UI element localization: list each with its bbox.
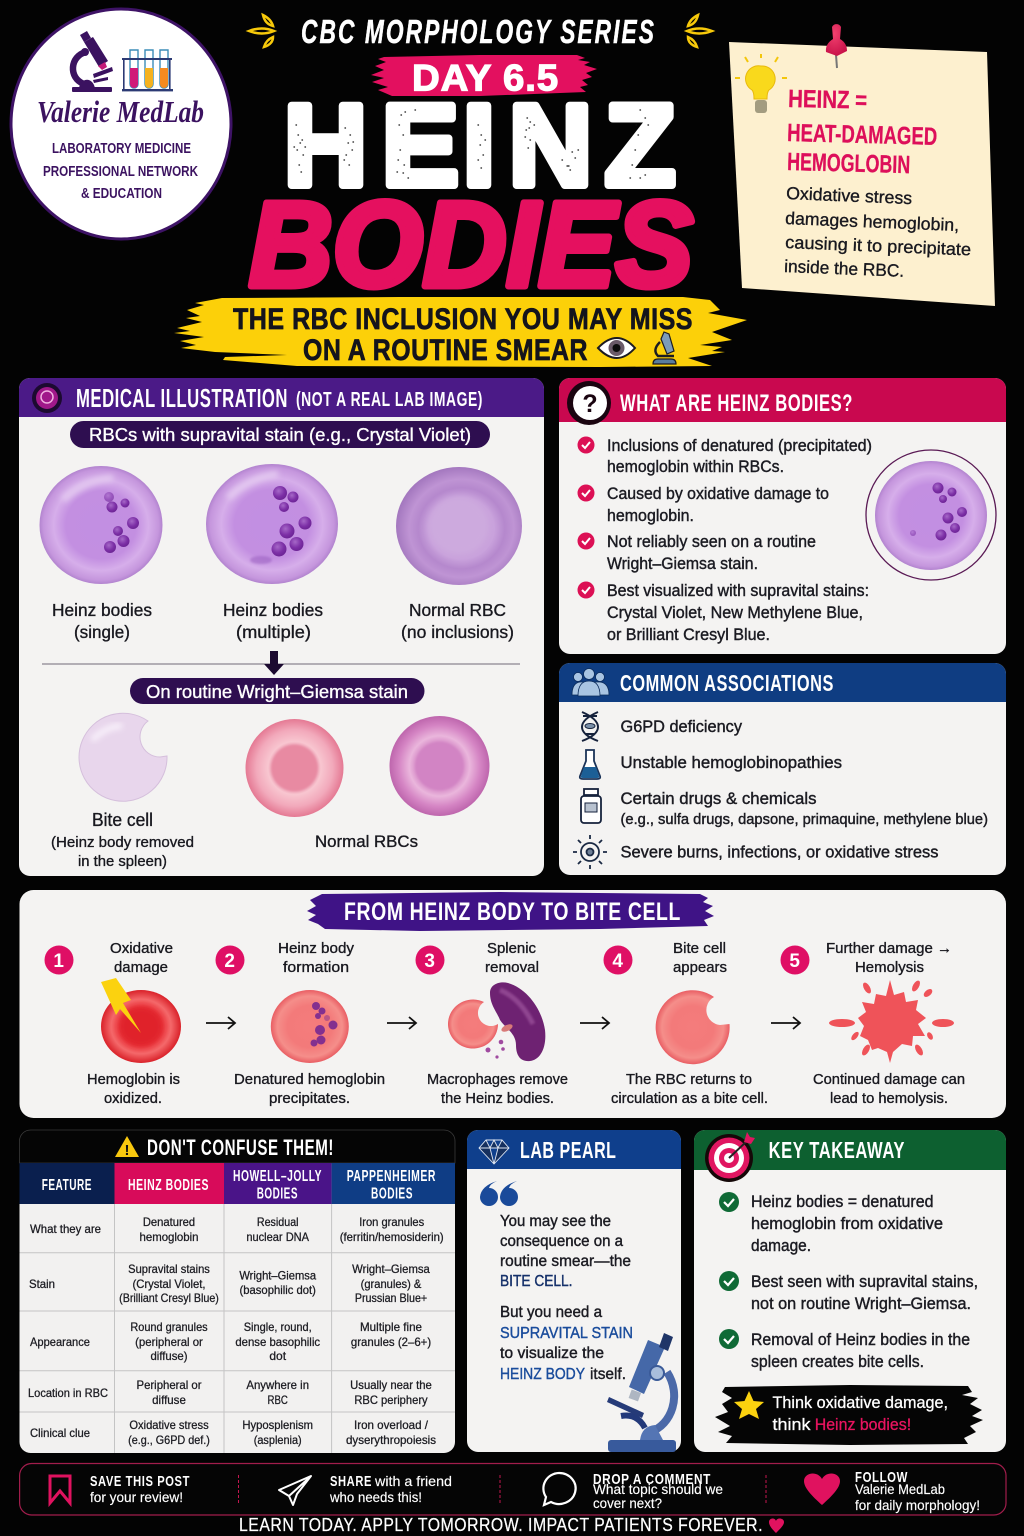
- step 3: Splenic: [487, 940, 536, 957]
- takeaway text: hemoglobin from oxidative: [751, 1215, 943, 1233]
- association list: (e.g., sulfa drugs, dapsone, primaquine, methylene blue): [620, 812, 988, 828]
- action: save: for your review!: [90, 1489, 183, 1505]
- note body: damages hemoglobin,: [785, 208, 960, 235]
- table row: stain: (Crystal Violet,: [132, 1277, 206, 1291]
- table row: location: Location in RBC: [28, 1386, 108, 1400]
- checklist: or Brilliant Cresyl Blue.: [607, 626, 770, 644]
- table row: clinical clue: Iron overload /: [354, 1418, 429, 1432]
- icon: right sparks: [687, 15, 712, 47]
- panel header: [559, 663, 1006, 702]
- labels: routine cells: Bite cell: [92, 810, 153, 830]
- table title bar: DON'T CONFUSE THEM!: [147, 1135, 334, 1160]
- table header row: HOWELL–JOLLY: [233, 1168, 322, 1185]
- table row: clinical clue: Oxidative stress: [129, 1418, 209, 1432]
- table row: what they are: hemoglobin: [140, 1230, 198, 1244]
- panel header: [559, 378, 1006, 425]
- section heading: FROM HEINZ BODY TO BITE CELL: [344, 898, 681, 926]
- action: follow: [804, 1469, 980, 1513]
- action: follow: for daily morphology!: [855, 1497, 980, 1513]
- note body: inside the RBC.: [784, 256, 905, 281]
- panel: key takeaway: [694, 1130, 1006, 1452]
- pill: wright-giemsa: On routine Wright–Giemsa stain: [146, 682, 408, 702]
- association list: Certain drugs & chemicals: [620, 790, 816, 808]
- cell: bite cell: [79, 713, 167, 801]
- panel header: LAB PEARL: [520, 1137, 616, 1163]
- action: comment: cover next?: [593, 1495, 662, 1511]
- panel header: COMMON ASSOCIATIONS: [620, 670, 834, 696]
- day badge: [371, 55, 597, 98]
- subtitle banner: [174, 297, 747, 367]
- table row: what they are: What they are: [30, 1222, 101, 1236]
- labels: routine cells: in the spleen): [78, 853, 167, 870]
- step 2: Denatured hemoglobin: [234, 1071, 385, 1088]
- takeaway text: Best seen with supravital stains,: [751, 1273, 978, 1291]
- action: follow: FOLLOW: [855, 1469, 908, 1486]
- table header row: PAPPENHEIMER: [347, 1168, 436, 1185]
- brand tagline: LABORATORY MEDICINE: [52, 141, 191, 157]
- table header row: FEATURE: [42, 1177, 92, 1194]
- day badge: DAY 6.5: [412, 58, 559, 98]
- step 5: 5: [789, 951, 801, 972]
- table header row: [20, 1163, 455, 1204]
- labels: routine cells: [51, 810, 418, 870]
- action: save: SAVE THIS POST: [90, 1473, 190, 1490]
- labels: stained cells: Normal RBC: [409, 600, 506, 620]
- panel header: KEY TAKEAWAY: [769, 1137, 905, 1163]
- arrow 4: [771, 1017, 800, 1029]
- checklist: hemoglobin within RBCs.: [607, 458, 784, 476]
- step 4: appears: [673, 959, 727, 976]
- table row: stain: Wright–Giemsa: [352, 1262, 430, 1276]
- checklist: Caused by oxidative damage to: [607, 485, 829, 503]
- table header row: BODIES: [257, 1186, 298, 1203]
- checklist: Crystal Violet, New Methylene Blue,: [607, 604, 863, 622]
- step 4: The RBC returns to: [626, 1071, 752, 1088]
- panel: pathway from heinz body to bite cell: [20, 890, 1006, 1118]
- labels: stained cells: [52, 600, 514, 642]
- step 5: lead to hemolysis.: [830, 1090, 948, 1107]
- logo badge: [11, 9, 231, 239]
- cell: heinz body diagram: [866, 450, 996, 580]
- takeaway text: damage.: [751, 1237, 811, 1255]
- action: share: with a friend: [374, 1473, 452, 1489]
- table row: stain: Stain: [29, 1277, 55, 1291]
- step 5: Hemolysis: [855, 959, 924, 976]
- action: share: [279, 1473, 452, 1505]
- cell: heinz single: [40, 466, 162, 584]
- arrow 2: [387, 1017, 416, 1029]
- table row: location: Peripheral or: [136, 1378, 202, 1392]
- table row: location: Anywhere in: [246, 1378, 309, 1392]
- icon: test tubes: [122, 50, 173, 91]
- table row: stain: Wright–Giemsa: [239, 1268, 316, 1282]
- takeaway text: not on routine Wright–Giemsa.: [751, 1295, 971, 1313]
- table row: stain: [29, 1262, 430, 1305]
- step 2: Heinz body: [278, 940, 355, 957]
- action: save: [50, 1473, 190, 1505]
- step 2: precipitates.: [269, 1090, 350, 1107]
- table row: appearance: Round granules: [130, 1320, 208, 1334]
- pill: wright-giemsa: [130, 678, 424, 704]
- step 1: Hemoglobin is: [87, 1071, 180, 1088]
- panel: what are heinz bodies: [559, 378, 1006, 654]
- panel header: [467, 1130, 681, 1169]
- action: share: SHARE: [330, 1473, 372, 1490]
- icon: flask: [580, 750, 600, 779]
- main title: bodies: BODIES: [249, 176, 693, 312]
- table row: what they are: Residual: [257, 1215, 299, 1229]
- takeaway checks: [719, 1192, 739, 1349]
- subtitle banner: ON A ROUTINE SMEAR: [303, 334, 588, 367]
- icon: virus: [573, 835, 607, 869]
- icon: burst cell: [829, 979, 954, 1063]
- icon: light bulb: [735, 54, 787, 113]
- footer slogan: LEARN TODAY. APPLY TOMORROW. IMPACT PATIENTS FOREVER.: [239, 1514, 763, 1535]
- note body: causing it to precipitate: [785, 232, 971, 259]
- table row: appearance: Appearance: [30, 1335, 90, 1349]
- checklist: hemoglobin.: [607, 507, 694, 525]
- table row: clinical clue: Clinical clue: [30, 1426, 90, 1440]
- pearl text: SUPRAVITAL STAIN: [500, 1325, 633, 1342]
- note body: [784, 183, 971, 281]
- step 5: Further damage →: [826, 940, 952, 957]
- table row: what they are: nuclear DNA: [246, 1230, 309, 1244]
- step 1: Oxidative: [110, 940, 173, 957]
- icon: diamond: [479, 1140, 509, 1164]
- association list: [620, 718, 988, 862]
- takeaway text: [751, 1193, 978, 1371]
- panel: comparison table: [20, 1130, 455, 1453]
- icon: dna: [582, 712, 598, 741]
- note heading: HEMOGLOBIN: [787, 148, 911, 179]
- cell: normal pink: [246, 719, 344, 817]
- table row: appearance: dot: [269, 1349, 287, 1363]
- pearl text: [500, 1213, 633, 1383]
- table row: location: RBC periphery: [354, 1393, 428, 1407]
- pearl text: consequence on a: [500, 1233, 623, 1250]
- table header row: BODIES: [371, 1186, 413, 1203]
- pearl text: But you need a: [500, 1304, 602, 1321]
- pill: supravital: RBCs with supravital stain (e.g., Crystal Violet): [89, 424, 471, 445]
- table row: stain: (granules) &: [361, 1277, 421, 1291]
- panel header: [19, 378, 544, 417]
- table header row: HEINZ BODIES: [128, 1177, 209, 1194]
- pearl text: itself.: [590, 1366, 626, 1383]
- table row: location: RBC: [268, 1393, 288, 1407]
- table row: clinical clue: dyserythropoiesis: [346, 1433, 436, 1447]
- step 2: [216, 940, 385, 1107]
- callout: think oxidative damage: Heinz bodies!: [815, 1416, 911, 1434]
- table row: stain: (Brilliant Cresyl Blue): [119, 1291, 219, 1305]
- table row: stain: Supravital stains: [128, 1262, 210, 1276]
- labels: stained cells: (no inclusions): [401, 622, 514, 642]
- icon: push pin: [826, 24, 847, 68]
- arrow 3: [580, 1017, 609, 1029]
- table row: clinical clue: Hyposplenism: [242, 1418, 313, 1432]
- note body: Oxidative stress: [786, 183, 913, 208]
- note heading: [787, 85, 938, 179]
- panel: lab pearl: [467, 1130, 681, 1452]
- pearl text: to visualize the: [500, 1345, 604, 1362]
- step 3: removal: [485, 959, 539, 976]
- callout: think oxidative damage: Think oxidative damage,: [772, 1394, 948, 1412]
- labels: stained cells: (multiple): [236, 622, 311, 642]
- icon: target: [705, 1132, 755, 1182]
- brand tagline: & EDUCATION: [81, 186, 162, 202]
- step 5: Continued damage can: [813, 1071, 965, 1088]
- labels: routine cells: (Heinz body removed: [51, 834, 194, 851]
- table row: appearance: granules (2–6+): [351, 1335, 431, 1349]
- table row: clinical clue: (e.g., G6PD def.): [128, 1433, 210, 1447]
- panel: common associations: [559, 663, 1006, 875]
- panel header: MEDICAL ILLUSTRATION: [76, 383, 288, 413]
- table row: appearance: Multiple fine: [360, 1320, 422, 1334]
- step 2: formation: [283, 959, 349, 976]
- table row: what they are: (ferritin/hemosiderin): [340, 1230, 444, 1244]
- checklist: Best visualized with supravital stains:: [607, 582, 869, 600]
- labels: stained cells: Heinz bodies: [223, 600, 323, 620]
- pearl text: HEINZ BODY: [500, 1366, 585, 1383]
- action: comment: DROP A COMMENT: [593, 1471, 711, 1488]
- step 4: Bite cell: [673, 940, 726, 957]
- step 2: 2: [224, 951, 236, 972]
- table title bar: [20, 1130, 455, 1163]
- icon: quote mark: [480, 1181, 518, 1206]
- labels: stained cells: Heinz bodies: [52, 600, 152, 620]
- table row: appearance: (peripheral or: [135, 1335, 203, 1349]
- step 3: Macrophages remove: [427, 1071, 568, 1088]
- icon: spleen: [490, 982, 545, 1061]
- panel header: (NOT A REAL LAB IMAGE): [296, 389, 483, 411]
- action: share: who needs this!: [329, 1489, 422, 1505]
- icon: blue microscope: [607, 1333, 676, 1452]
- labels: stained cells: (single): [74, 622, 130, 642]
- association list: Severe burns, infections, or oxidative stress: [620, 844, 938, 862]
- table row: appearance: diffuse): [150, 1349, 188, 1363]
- step 5: [780, 940, 965, 1107]
- section heading: [307, 892, 714, 931]
- table row: stain: Prussian Blue+: [355, 1291, 427, 1305]
- table title bar: !: [124, 1142, 130, 1159]
- action: follow: Valerie MedLab: [855, 1481, 945, 1497]
- step 4: [604, 940, 768, 1107]
- table row: what they are: Iron granules: [359, 1215, 424, 1229]
- icon: small microscope: [653, 332, 676, 364]
- association list: Unstable hemoglobinopathies: [620, 754, 842, 772]
- main title: heinz: HEINZ: [284, 82, 675, 210]
- pearl text: routine smear—the: [500, 1253, 631, 1270]
- panel: medical illustration: [19, 378, 544, 876]
- icon: lightning bolt: [101, 978, 141, 1033]
- step 1: [44, 940, 181, 1107]
- step 1: damage: [114, 959, 168, 976]
- brand name: Valerie MedLab: [37, 94, 204, 129]
- checklist: Not reliably seen on a routine: [607, 533, 816, 551]
- step 4: 4: [612, 951, 624, 972]
- arrow: down: [264, 651, 284, 675]
- table row: appearance: Single, round,: [244, 1320, 312, 1334]
- takeaway text: Removal of Heinz bodies in the: [751, 1331, 970, 1349]
- panel header: ?: [582, 390, 598, 418]
- pearl text: You may see the: [500, 1213, 611, 1230]
- table row: location: diffuse: [152, 1393, 186, 1407]
- checklist: Inclusions of denatured (precipitated): [607, 437, 872, 455]
- step 3: [416, 940, 568, 1107]
- checklist: [578, 436, 872, 644]
- sticky note: [729, 24, 995, 306]
- icon: microscope: [72, 31, 113, 92]
- brand tagline: PROFESSIONAL NETWORK: [43, 164, 198, 180]
- icon: pill bottle: [581, 789, 601, 823]
- cell: heinz multiple: [206, 464, 338, 584]
- step 4: circulation as a bite cell.: [611, 1090, 768, 1107]
- note heading: HEINZ =: [788, 85, 867, 115]
- footer action bar: [20, 1464, 1006, 1515]
- takeaway text: spleen creates bite cells.: [751, 1353, 924, 1371]
- step 3: 3: [424, 951, 436, 972]
- cell: normal magenta: [390, 716, 490, 816]
- icon: eye: [598, 338, 635, 358]
- table row: location: Usually near the: [350, 1378, 432, 1392]
- panel header: WHAT ARE HEINZ BODIES?: [620, 390, 853, 417]
- labels: routine cells: Normal RBCs: [315, 832, 418, 851]
- table row: stain: (basophilic dot): [240, 1283, 316, 1297]
- callout: think oxidative damage: think: [772, 1416, 811, 1434]
- brand tagline: [43, 141, 198, 202]
- arrow 1: [206, 1017, 235, 1029]
- panel header: [694, 1130, 1006, 1170]
- action: comment: What topic should we: [593, 1481, 723, 1497]
- step 1: oxidized.: [104, 1090, 162, 1107]
- table row: location: [28, 1378, 432, 1407]
- series heading: CBC MORPHOLOGY SERIES: [301, 13, 656, 50]
- table row: appearance: dense basophilic: [235, 1335, 320, 1349]
- table row: clinical clue: (asplenia): [254, 1433, 302, 1447]
- icon: left sparks: [249, 15, 274, 47]
- note heading: HEAT-DAMAGED: [787, 119, 938, 151]
- callout: think oxidative damage: [715, 1385, 983, 1445]
- table row: what they are: Denatured: [143, 1215, 195, 1229]
- association list: G6PD deficiency: [620, 718, 743, 736]
- cell: normal rbc: [396, 467, 522, 585]
- subtitle banner: THE RBC INCLUSION YOU MAY MISS: [233, 303, 693, 336]
- table row: clinical clue: [30, 1418, 436, 1447]
- pearl text: BITE CELL.: [500, 1273, 572, 1290]
- table row: what they are: [30, 1215, 444, 1244]
- checklist: Wright–Giemsa stain.: [607, 555, 758, 573]
- table row: appearance: [30, 1320, 431, 1363]
- step 3: the Heinz bodies.: [441, 1090, 554, 1107]
- action: comment: [543, 1471, 723, 1511]
- takeaway text: Heinz bodies = denatured: [751, 1193, 934, 1211]
- step 1: 1: [53, 951, 65, 972]
